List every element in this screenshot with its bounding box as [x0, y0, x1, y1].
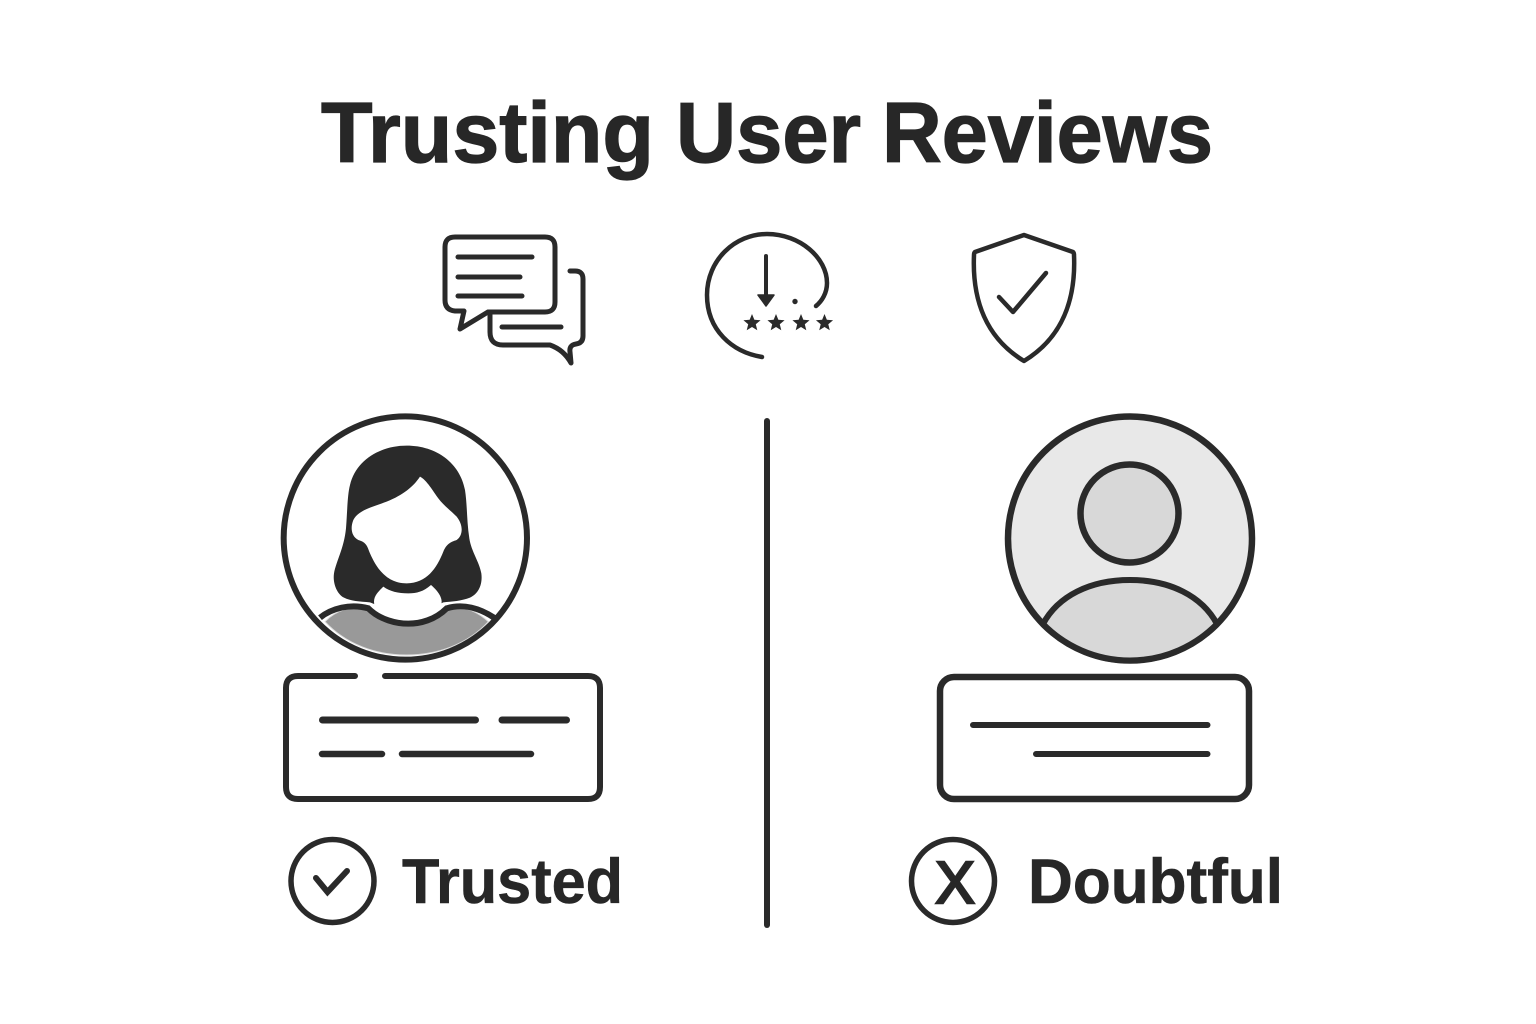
avatar background ring [1008, 416, 1252, 660]
title: User [676, 86, 861, 181]
center divider [764, 421, 770, 925]
shoulders [1043, 580, 1217, 660]
badge: trusted check circle [291, 840, 374, 922]
panel: doubtful reviewer avatar [1008, 416, 1252, 660]
review text lines [322, 716, 566, 724]
neck [374, 585, 442, 620]
shirt [325, 608, 488, 655]
panel: trusted review box [286, 676, 600, 799]
icon: shield with check [974, 235, 1074, 361]
label: Trusted: Trusted [402, 847, 623, 917]
hair [334, 446, 482, 618]
shoulders [320, 606, 494, 624]
icon: chat bubbles [445, 237, 583, 363]
badge: doubtful X circle [912, 840, 994, 922]
panel: doubtful review box [940, 677, 1249, 799]
title: Trusting [321, 86, 654, 181]
title [321, 86, 1213, 181]
face [352, 477, 462, 583]
panel: trusted reviewer avatar [284, 416, 527, 660]
avatar ring [284, 416, 527, 660]
head [1080, 464, 1178, 562]
icon: rating dial with arrow and stars [707, 234, 833, 357]
label: Doubtful: Doubtful [1028, 847, 1283, 917]
badge: doubtful X circle: X [935, 850, 975, 916]
review text lines [973, 725, 1208, 754]
title: Reviews [882, 86, 1213, 181]
